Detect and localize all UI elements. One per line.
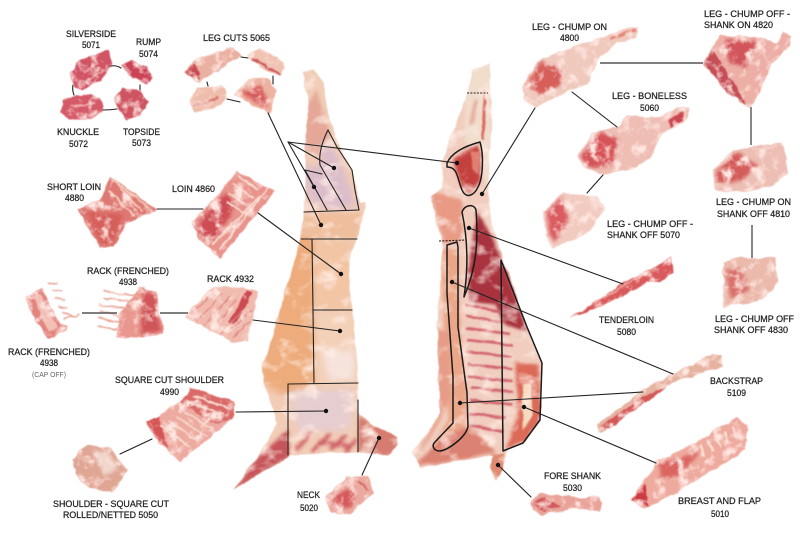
label: breast and flap bbox=[678, 496, 761, 520]
label: topside: TOPSIDE bbox=[123, 127, 160, 138]
label: breast and flap: 5010 bbox=[711, 509, 729, 520]
cut: knuckle bbox=[59, 94, 103, 120]
label: leg chump on shank off 4810: SHANK OFF 4810 bbox=[717, 209, 790, 220]
leader lines with dots bbox=[157, 63, 752, 497]
cut: topside bbox=[115, 88, 148, 120]
label: leg cuts: LEG CUTS 5065 bbox=[203, 33, 270, 44]
cut: backstrap bbox=[596, 354, 723, 433]
label: short loin: SHORT LOIN bbox=[47, 182, 101, 193]
label: topside: 5073 bbox=[132, 138, 151, 149]
label: rack frenched cap off: 4938 bbox=[40, 358, 58, 369]
cut: short loin bbox=[77, 177, 157, 247]
label: short loin: 4880 bbox=[65, 193, 84, 204]
label: short loin bbox=[47, 182, 101, 204]
label: tenderloin bbox=[599, 315, 654, 338]
label: rump bbox=[136, 37, 161, 60]
label: neck: NECK bbox=[297, 490, 321, 501]
cut: leg chump off shank on bbox=[703, 32, 792, 107]
cut: leg cuts bbox=[184, 48, 285, 113]
cut: rack frenched bbox=[98, 287, 163, 338]
label: leg chump off shank on: SHANK ON 4820 bbox=[704, 20, 773, 31]
cut: leg chump off shank off 4830 bbox=[723, 257, 778, 308]
label: rack frenched: 4938 bbox=[119, 277, 137, 288]
label: topside bbox=[123, 127, 160, 149]
label: leg chump off shank off 5070 bbox=[607, 219, 693, 241]
label: silverside: SILVERSIDE bbox=[66, 29, 116, 40]
label: rack frenched bbox=[87, 266, 169, 288]
label: rump: RUMP bbox=[136, 37, 161, 48]
label: fore shank: 5030 bbox=[563, 483, 582, 494]
cut: neck bbox=[326, 476, 373, 514]
label: square cut shoulder: SQUARE CUT SHOULDER bbox=[115, 375, 224, 386]
region outlines: inner carcass bbox=[433, 93, 542, 451]
label: leg chump on: LEG - CHUMP ON bbox=[532, 22, 607, 33]
label: neck: 5020 bbox=[300, 503, 318, 514]
cut: rump bbox=[121, 60, 153, 84]
connectors: leg muscles bbox=[73, 66, 140, 110]
label: leg chump off shank off 5070: SHANK OFF 5070 bbox=[607, 230, 680, 241]
label: rump: 5074 bbox=[139, 49, 158, 60]
label: rack frenched cap off: RACK (FRENCHED) bbox=[8, 347, 90, 358]
label: leg chump on shank off 4810 bbox=[716, 197, 791, 220]
label: fore shank bbox=[544, 471, 602, 494]
label: shoulder square cut rolled netted bbox=[53, 499, 169, 521]
region outlines: outer carcass bbox=[288, 130, 359, 455]
label: square cut shoulder: 4990 bbox=[160, 387, 179, 398]
cut: rack frenched cap off bbox=[27, 283, 79, 340]
label: backstrap bbox=[710, 376, 763, 399]
cut: leg chump on bbox=[522, 28, 637, 107]
label: leg chump on shank off 4810: LEG - CHUMP ON bbox=[716, 197, 791, 208]
label: backstrap: BACKSTRAP bbox=[710, 376, 763, 387]
label: square cut shoulder bbox=[115, 375, 224, 398]
label: knuckle: 5072 bbox=[69, 139, 88, 150]
label: tenderloin: 5080 bbox=[617, 327, 636, 338]
label: knuckle: KNUCKLE bbox=[57, 127, 99, 138]
label: leg boneless: 5060 bbox=[640, 103, 659, 114]
connectors: leg cuts bbox=[207, 57, 273, 102]
label: breast and flap: BREAST AND FLAP bbox=[678, 496, 761, 507]
label: leg chump off shank off 4830: LEG - CHUMP OFF bbox=[715, 314, 794, 325]
label: leg chump on bbox=[532, 22, 607, 44]
label: rack frenched cap off: (CAP OFF) bbox=[32, 372, 66, 379]
label: neck bbox=[297, 490, 321, 514]
label: rack frenched cap off bbox=[8, 347, 90, 379]
label: tenderloin: TENDERLOIN bbox=[599, 315, 654, 326]
outer carcass view bbox=[232, 69, 400, 491]
label: shoulder square cut rolled netted: SHOULDER - SQUARE CUT bbox=[53, 499, 169, 510]
cut: square cut shoulder bbox=[145, 388, 235, 462]
cut: loin bbox=[193, 172, 275, 258]
cut: breast and flap bbox=[630, 417, 747, 508]
cut: leg boneless bbox=[577, 107, 690, 173]
cut: leg chump on shank off 4810 bbox=[713, 142, 788, 193]
label: silverside: 5071 bbox=[82, 40, 100, 51]
cut: fore shank bbox=[530, 493, 600, 515]
cut: rack bbox=[185, 287, 258, 343]
cut: shoulder rolled netted bbox=[72, 445, 128, 492]
label: loin: LOIN 4860 bbox=[172, 184, 215, 195]
label: leg chump off shank off 4830: SHANK OFF 4830 bbox=[714, 325, 788, 336]
label: leg boneless bbox=[612, 91, 687, 114]
label: shoulder square cut rolled netted: ROLLED/NETTED 5050 bbox=[63, 510, 158, 521]
label: knuckle bbox=[57, 127, 99, 150]
label: leg chump off shank off 5070: LEG - CHUMP OFF - bbox=[607, 219, 693, 230]
connectors: racks bbox=[82, 312, 188, 314]
label: silverside bbox=[66, 29, 116, 51]
label: fore shank: FORE SHANK bbox=[544, 471, 602, 482]
label: leg chump on: 4800 bbox=[560, 33, 579, 44]
cut: leg chump off shank off 5070 bbox=[543, 193, 606, 248]
label: leg chump off shank on bbox=[704, 9, 790, 31]
label: leg chump off shank on: LEG - CHUMP OFF - bbox=[704, 9, 790, 20]
connector: shoulder to rolled bbox=[120, 439, 152, 454]
label: backstrap: 5109 bbox=[727, 388, 746, 399]
label: leg chump off shank off 4830 bbox=[714, 314, 794, 336]
inner carcass view bbox=[413, 62, 542, 481]
cut: tenderloin bbox=[570, 257, 673, 318]
label: leg boneless: LEG - BONELESS bbox=[612, 91, 687, 102]
cut: silverside bbox=[71, 50, 112, 90]
label: rack: RACK 4932 bbox=[207, 274, 254, 285]
label: rack frenched: RACK (FRENCHED) bbox=[87, 266, 169, 277]
